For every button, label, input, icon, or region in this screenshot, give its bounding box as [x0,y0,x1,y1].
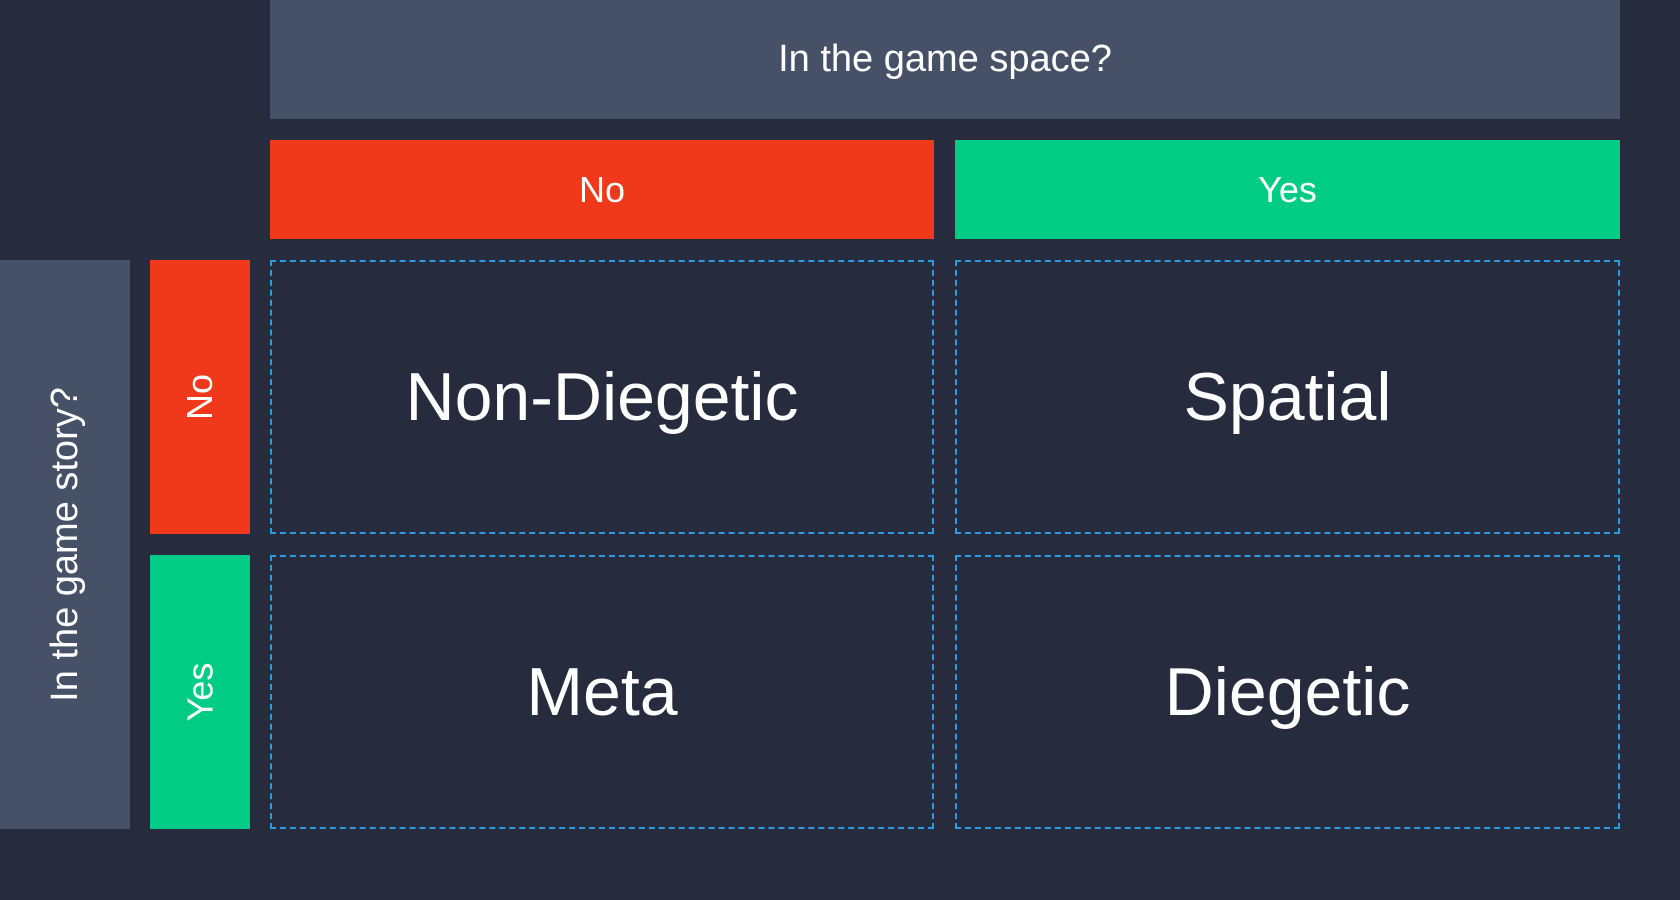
row header: in the game story: In the game story? [44,387,86,702]
column header: no: No [579,168,625,210]
column header: yes [955,140,1620,239]
cell: spatial: Spatial [1184,359,1391,435]
cell: meta: Meta [526,654,678,730]
column header: no [270,140,934,239]
header: in the game space [270,0,1620,119]
row header: in the game story [0,260,130,829]
column header: yes: Yes [1258,168,1317,210]
row header: yes [150,555,250,829]
cell: diegetic: Diegetic [1165,654,1410,730]
cell: meta [270,555,934,829]
cell: spatial [955,260,1620,534]
cell: diegetic [955,555,1620,829]
row header: no: No [179,374,220,420]
row header: no [150,260,250,534]
header: in the game space: In the game space? [778,38,1112,80]
cell: non-diegetic [270,260,934,534]
cell: non-diegetic: Non-Diegetic [405,359,799,435]
row header: yes: Yes [179,663,220,721]
